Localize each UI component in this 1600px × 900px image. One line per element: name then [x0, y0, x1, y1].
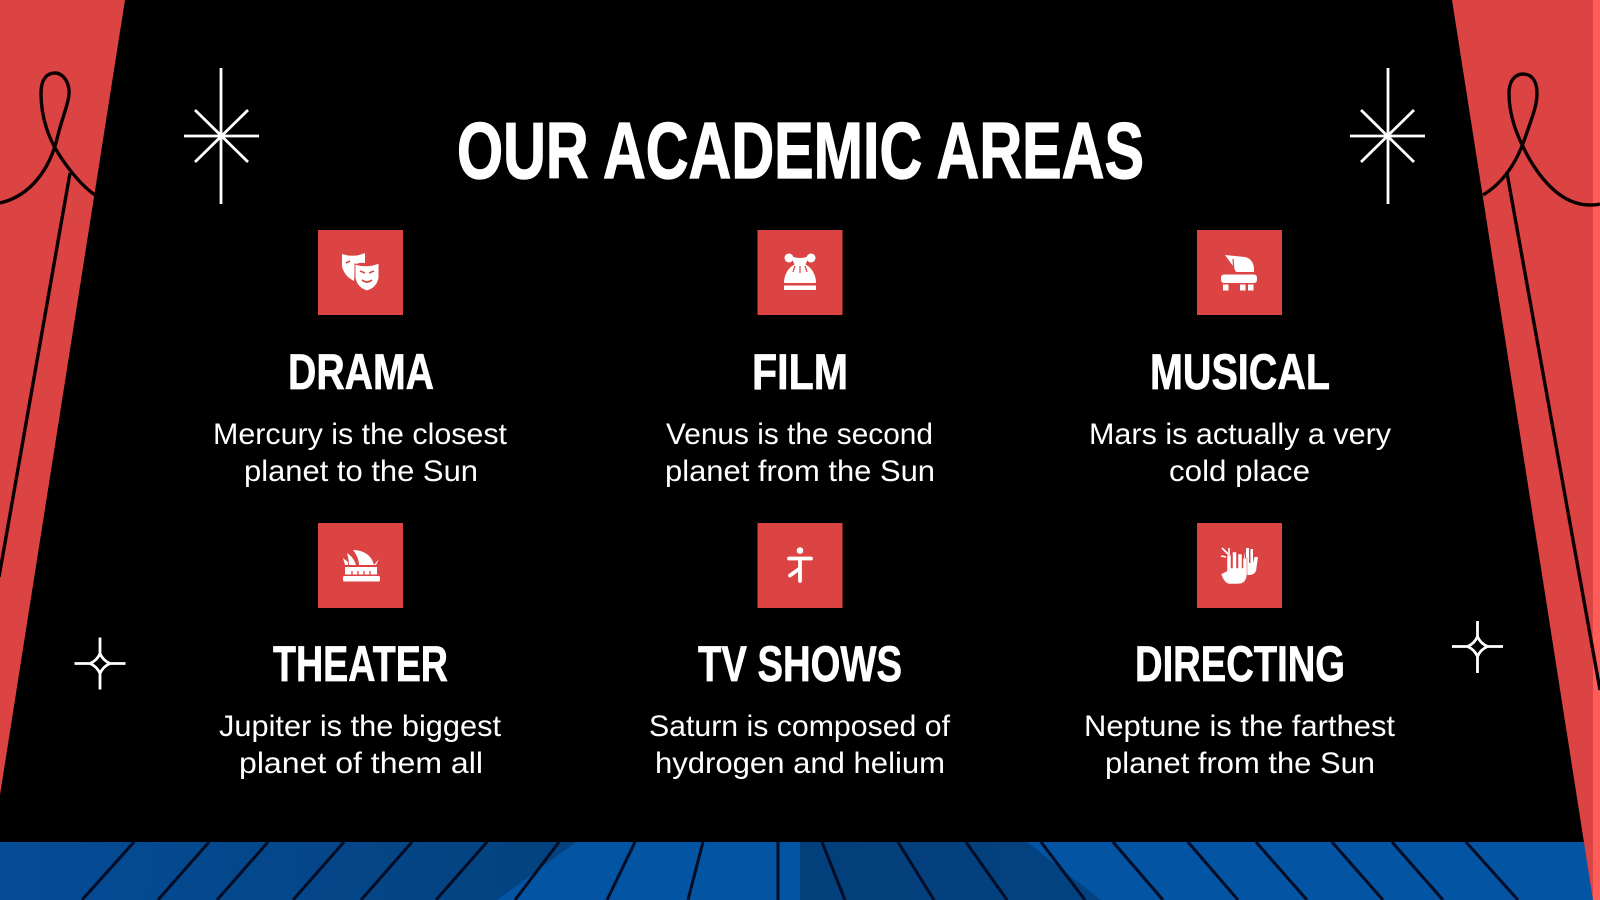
panel: theater	[219, 523, 502, 780]
text: directing description	[1084, 710, 1396, 780]
text: film description: Venus is the second	[666, 418, 933, 451]
title: OUR ACADEMIC AREAS	[457, 106, 1144, 195]
sparkle: top left	[184, 68, 259, 204]
icon: grand piano	[1197, 230, 1282, 315]
sparkle: lower left	[74, 638, 126, 690]
text: drama description: Mercury is the closest	[213, 418, 508, 451]
icon: dancer	[758, 523, 842, 608]
text: directing description: planet from the Sun	[1105, 747, 1375, 780]
icon: clapping hands	[1197, 523, 1282, 608]
text: theater description: Jupiter is the biggest	[219, 710, 502, 743]
panel: tv shows	[649, 523, 951, 780]
heading: tv shows: TV SHOWS	[698, 636, 902, 692]
stage floor	[0, 842, 1600, 900]
left curtain	[0, 0, 125, 795]
sparkle: lower right	[1452, 621, 1503, 673]
heading: drama: DRAMA	[288, 344, 434, 400]
text: theater description: planet of them all	[239, 747, 483, 780]
text: directing description: Neptune is the farthest	[1084, 710, 1396, 743]
panel: drama	[213, 230, 508, 488]
text: musical description: cold place	[1169, 455, 1310, 488]
heading: directing: DIRECTING	[1135, 636, 1345, 692]
panel: film	[665, 230, 935, 488]
panel: musical	[1089, 230, 1391, 488]
heading: theater: THEATER	[273, 636, 448, 692]
text: film description	[665, 418, 935, 488]
text: tv shows description: Saturn is composed of	[649, 710, 951, 743]
right curtain	[1452, 0, 1600, 900]
text: tv shows description	[649, 710, 951, 780]
panel: directing	[1084, 523, 1396, 780]
heading: film: FILM	[752, 344, 848, 400]
icon: dress	[758, 230, 842, 315]
text: theater description	[219, 710, 502, 780]
text: drama description: planet to the Sun	[244, 455, 478, 488]
icon: theater masks	[318, 230, 403, 315]
heading: musical: MUSICAL	[1150, 344, 1330, 400]
sparkle: top right	[1350, 68, 1425, 204]
icon: opera house	[318, 523, 403, 608]
text: drama description	[213, 418, 508, 488]
text: musical description: Mars is actually a very	[1089, 418, 1391, 451]
text: musical description	[1089, 418, 1391, 488]
text: film description: planet from the Sun	[665, 455, 935, 488]
text: tv shows description: hydrogen and helium	[655, 747, 945, 780]
